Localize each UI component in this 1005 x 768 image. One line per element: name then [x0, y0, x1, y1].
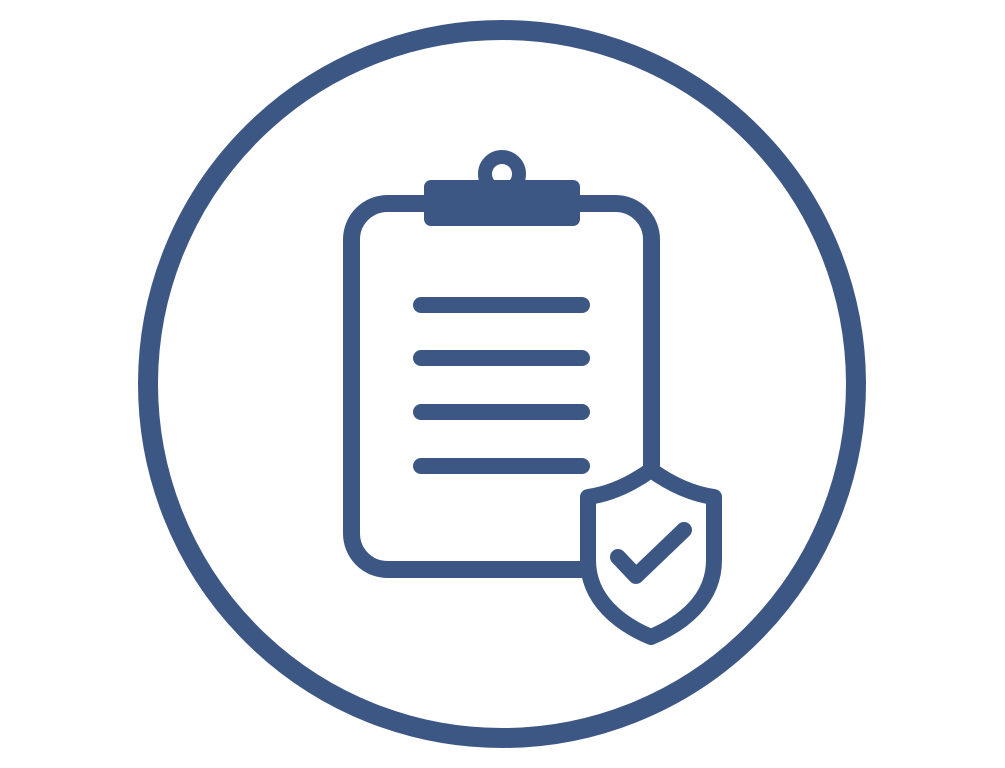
outer circle	[148, 30, 856, 738]
clip ring	[485, 157, 519, 191]
icon: shield with checkmark	[588, 470, 714, 637]
clipboard board	[352, 204, 652, 570]
checkmark	[618, 530, 684, 576]
clip bar	[424, 180, 580, 226]
clipboard	[352, 157, 652, 570]
text lines	[421, 305, 582, 466]
